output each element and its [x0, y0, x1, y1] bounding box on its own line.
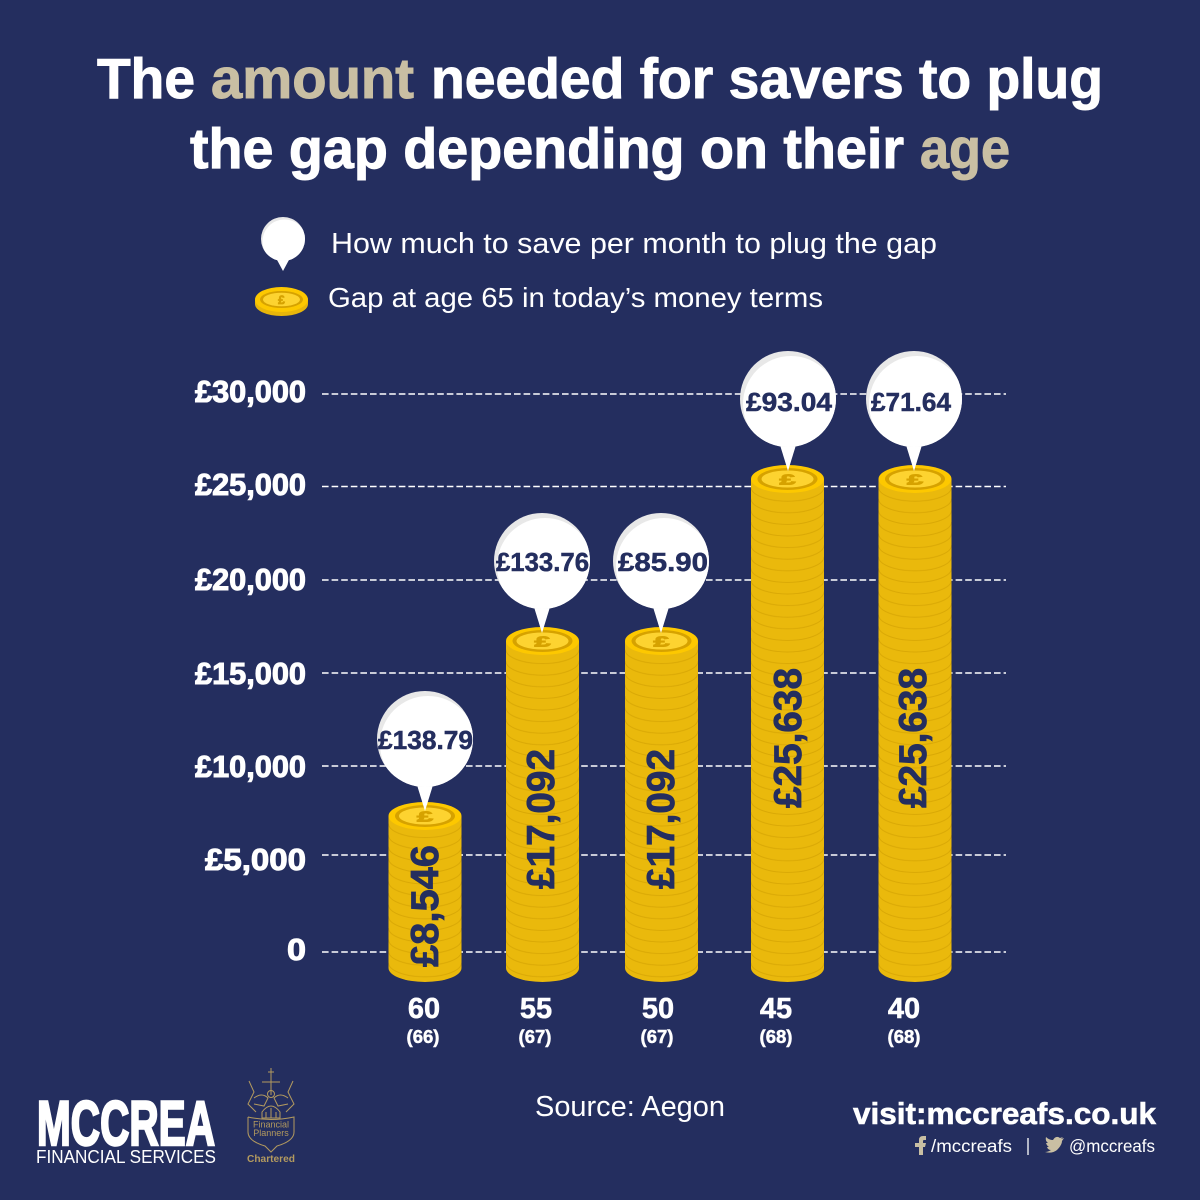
legend text: monthly saving: How much to save per month to plug the gap: [331, 228, 937, 260]
title: amount: [211, 47, 414, 111]
x axis labels: (67): [641, 1026, 673, 1047]
bubble: £93.04: [740, 351, 839, 471]
coin stack: age 55: £: [534, 634, 552, 650]
social links: [915, 1136, 1155, 1156]
x axis labels: 45: [760, 993, 792, 1025]
coin stack: age 45: £: [780, 472, 797, 488]
stack values: £25,638: [767, 668, 810, 808]
x axis labels: 60: [408, 993, 440, 1025]
y axis labels: 0: [287, 933, 306, 967]
title: [97, 47, 1103, 181]
logo: chartered crest: Financial: [253, 1120, 289, 1130]
stack values: £8,546: [404, 845, 447, 967]
y axis labels: £25,000: [195, 468, 306, 502]
logo: McCrea: FINANCIAL SERVICES: [36, 1147, 216, 1167]
x axis labels: [407, 993, 920, 1047]
title: age: [920, 117, 1010, 181]
bubble: £71.64: [866, 351, 965, 471]
icon: coin: [255, 287, 308, 316]
y axis labels: £30,000: [195, 375, 306, 409]
coin stack: age 45: [751, 465, 824, 982]
x axis labels: (68): [760, 1026, 792, 1047]
legend: [255, 217, 937, 316]
legend text: gap: Gap at age 65 in today’s money terms: [328, 282, 823, 313]
title: needed for savers to plug: [431, 47, 1103, 111]
icon: speech bubble: [261, 217, 306, 271]
stack values: £25,638: [892, 668, 935, 808]
x axis labels: (66): [407, 1026, 439, 1047]
stack values: £17,092: [640, 749, 683, 889]
bubble: £138.79: £138.79: [378, 725, 473, 755]
coin stack: age 50: £: [654, 634, 671, 650]
x axis labels: 40: [888, 993, 920, 1025]
bubble: £71.64: £71.64: [871, 387, 952, 417]
logo: chartered crest: Chartered: [247, 1153, 295, 1165]
y axis labels: £10,000: [195, 750, 306, 784]
coin stack: age 40: [878, 465, 952, 982]
social links: /mccreafs: [931, 1136, 1012, 1156]
y axis labels: £20,000: [195, 563, 306, 597]
x axis labels: (68): [888, 1026, 920, 1047]
bubble: £133.76: [494, 513, 593, 633]
coin stack: age 50: [625, 627, 698, 982]
bubble: £138.79: [377, 691, 476, 811]
icon: coin: £: [278, 293, 285, 307]
website: visit:mccreafs.co.uk: [853, 1096, 1157, 1131]
x axis labels: (67): [519, 1026, 551, 1047]
coin stack: age 60: £: [417, 808, 434, 826]
y axis labels: £15,000: [195, 657, 306, 691]
social links: @mccreafs: [1069, 1136, 1155, 1156]
logo: McCrea: [36, 1089, 216, 1167]
x axis labels: 50: [642, 993, 674, 1025]
bubble: £133.76: £133.76: [496, 547, 589, 577]
logo: chartered crest: [247, 1068, 295, 1165]
gridlines: [322, 394, 1006, 952]
y axis labels: [195, 375, 306, 967]
coin stack: age 40: £: [907, 472, 924, 488]
icon: facebook: [915, 1136, 926, 1155]
bubble: £85.90: £85.90: [618, 547, 708, 577]
x axis labels: 55: [520, 993, 552, 1025]
stack values: [404, 668, 935, 967]
title: The: [97, 47, 195, 111]
logo: chartered crest: Planners: [253, 1128, 289, 1138]
coin stack: age 60: [388, 802, 462, 982]
bubble: £85.90: [613, 513, 712, 633]
title: the gap depending on their: [190, 117, 904, 181]
logo: McCrea: MCCREA: [37, 1089, 215, 1159]
icon: twitter: [1045, 1137, 1064, 1153]
y axis labels: £5,000: [205, 843, 306, 877]
stack values: £17,092: [520, 749, 563, 889]
coin stack: age 55: [506, 627, 579, 982]
bubble: £93.04: £93.04: [746, 387, 833, 417]
source: Source: Aegon: [535, 1091, 725, 1123]
